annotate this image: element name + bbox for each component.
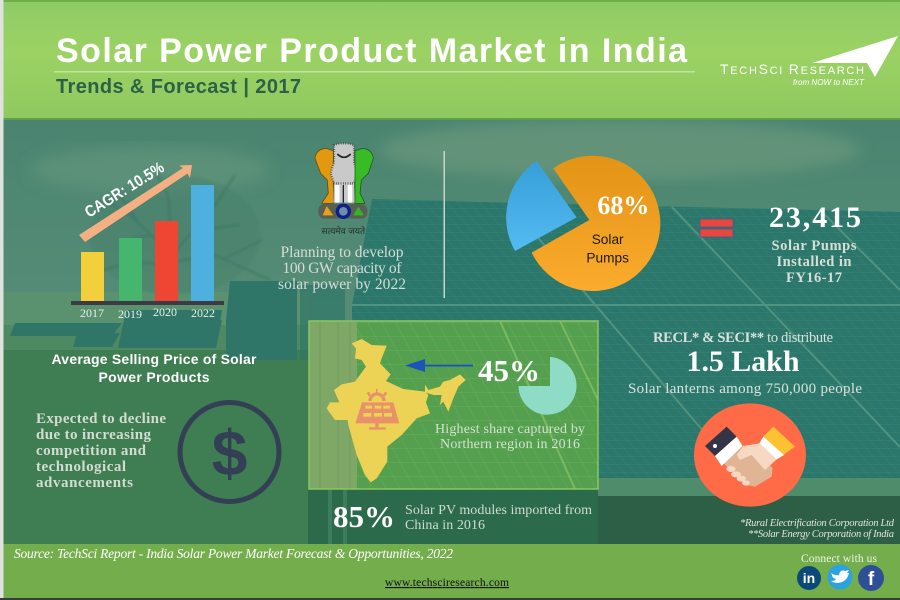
website link: www.techsciresearch.com xyxy=(385,577,509,589)
solar pumps label xyxy=(586,232,629,266)
85% statistic: Solar PV modules imported from xyxy=(405,503,592,518)
share pie xyxy=(518,357,576,415)
logo: TechSci Research: TECHSCI RESEARCH xyxy=(720,61,864,77)
equals sign xyxy=(700,219,733,237)
green lion xyxy=(355,148,373,203)
85% statistic: 85% xyxy=(333,499,395,534)
decline explanation: competition and xyxy=(36,443,147,459)
logo: TechSci Research: from NOW to NEXT xyxy=(793,77,865,87)
footnotes xyxy=(740,518,895,540)
arrow pointing to northern region xyxy=(405,359,473,372)
right cuff xyxy=(763,427,795,455)
footer band xyxy=(0,544,900,600)
bar 2019 xyxy=(119,238,142,301)
lanterns distribution text: 1.5 Lakh xyxy=(686,345,800,378)
icon: twitter xyxy=(828,564,852,590)
pumps installed statistic: Installed in xyxy=(776,254,852,270)
footnotes: *Rural Electrification Corporation Ltd xyxy=(740,518,895,529)
title underline xyxy=(54,71,695,72)
CAGR growth arrow shape xyxy=(79,165,192,242)
panel: regional share xyxy=(309,321,598,489)
bar chart with CAGR arrow xyxy=(71,159,224,321)
orange lion xyxy=(315,148,333,203)
year labels xyxy=(80,305,215,321)
connect with us: Connect with us xyxy=(801,553,878,565)
icon: handshake xyxy=(694,403,806,507)
bar 2017 xyxy=(81,252,104,301)
share description: Highest share captured by xyxy=(435,422,585,437)
base with wheel xyxy=(318,204,367,219)
average selling price heading xyxy=(52,351,257,385)
45% label: 45% xyxy=(478,353,540,388)
title: Solar Power Product Market in India xyxy=(56,32,688,70)
decline explanation: due to increasing xyxy=(36,427,152,443)
icon: dollar xyxy=(180,402,279,502)
national emblem of India xyxy=(315,143,373,238)
source line: Source: TechSci Report - India Solar Power Market Forecast & Opportunities, 2022 xyxy=(14,546,453,561)
icon: solar panel on map xyxy=(355,389,399,430)
decline explanation: Expected to decline xyxy=(36,411,166,427)
footnotes: **Solar Energy Corporation of India xyxy=(748,529,894,540)
decline explanation: technological xyxy=(36,459,126,475)
left page edge xyxy=(0,0,4,598)
solar pumps label: Solar xyxy=(592,232,624,247)
pumps installed statistic xyxy=(769,201,861,286)
chart baseline xyxy=(71,301,224,305)
icon: facebook xyxy=(858,565,884,591)
68% slice xyxy=(532,156,660,291)
background photo: sky, solar panels and grass xyxy=(0,118,900,544)
year labels: 2017 xyxy=(80,306,104,320)
capacity text: solar power by 2022 xyxy=(278,276,406,293)
icon: dollar: $ xyxy=(212,417,247,489)
CAGR label: CAGR: 10.5% xyxy=(82,159,167,221)
subtitle: Trends & Forecast | 2017 xyxy=(56,76,301,98)
pumps installed statistic: FY16-17 xyxy=(786,270,842,286)
capacity text xyxy=(278,244,406,293)
average selling price heading: Average Selling Price of Solar xyxy=(52,351,257,367)
motto: सत्यमेव जयते xyxy=(322,225,366,238)
left cuff xyxy=(705,427,737,456)
lanterns distribution text: Solar lanterns among 750,000 people xyxy=(628,381,862,397)
vertical divider xyxy=(444,151,445,298)
year labels: 2019 xyxy=(118,307,142,321)
share description xyxy=(435,422,585,452)
india map xyxy=(327,339,466,482)
average selling price heading: Power Products xyxy=(98,369,210,385)
pumps installed statistic: Solar Pumps xyxy=(772,238,857,254)
pie chart: solar pumps xyxy=(506,156,660,291)
68% label: 68% xyxy=(597,191,649,220)
dark hand xyxy=(724,446,773,487)
icon: facebook: f xyxy=(868,569,875,590)
bar 2020 xyxy=(155,221,178,301)
icon: linkedin xyxy=(797,566,821,590)
pumps installed statistic: 23,415 xyxy=(769,201,861,234)
icon: linkedin: in xyxy=(803,570,815,586)
light hand xyxy=(737,443,777,470)
capacity text: Planning to develop xyxy=(280,244,404,261)
decline explanation xyxy=(36,411,166,491)
lanterns distribution text: RECL* & SECI** to distribute xyxy=(653,330,833,346)
solar pumps label: Pumps xyxy=(586,251,629,266)
year labels: 2022 xyxy=(191,306,215,320)
logo: TechSci Research xyxy=(720,36,898,87)
small panel rows on left xyxy=(10,281,345,360)
lanterns distribution text xyxy=(628,330,862,397)
year labels: 2020 xyxy=(153,305,177,319)
85% statistic: China in 2016 xyxy=(405,518,485,533)
decline explanation: advancements xyxy=(36,475,133,491)
header band xyxy=(0,0,900,120)
bar 2022 xyxy=(191,185,214,301)
remaining slice xyxy=(506,161,577,251)
capacity text: 100 GW capacity of xyxy=(282,260,402,277)
central lion xyxy=(331,143,357,203)
85% statistic xyxy=(333,499,592,534)
share description: Northern region in 2016 xyxy=(440,437,580,452)
